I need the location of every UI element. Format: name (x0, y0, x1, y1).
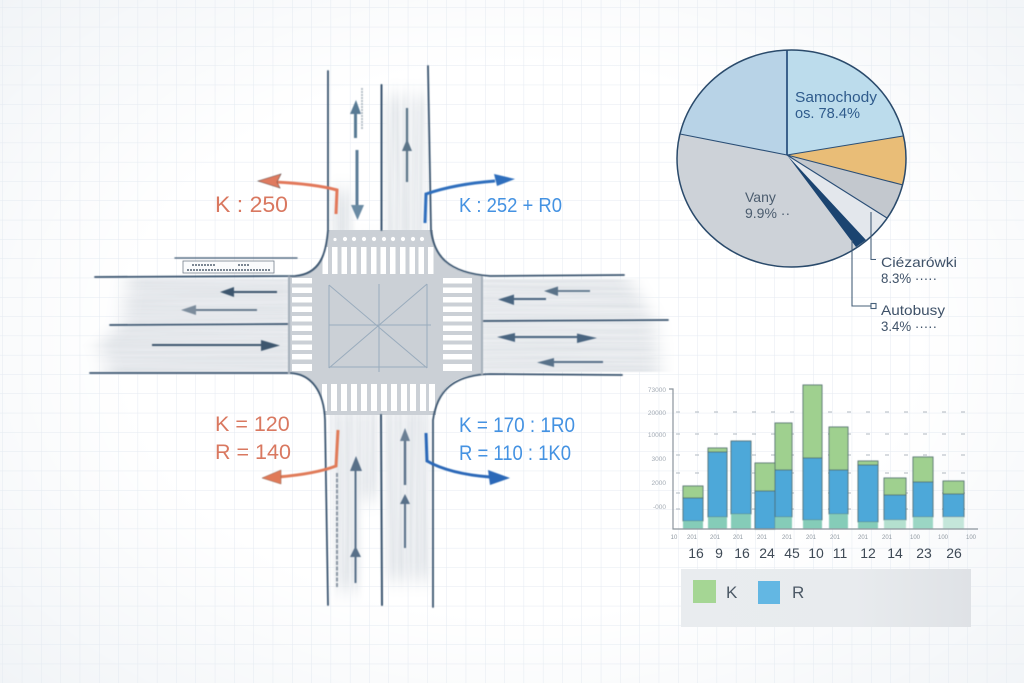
panel: stacked bar chart (648, 385, 980, 627)
arrow: north lane down (351, 150, 364, 220)
x axis small labels: 201 (782, 535, 793, 541)
x axis values: 14 (887, 545, 903, 561)
x axis small labels: 201 (733, 535, 744, 541)
arrow: north lane up (350, 100, 361, 138)
x axis values: 11 (833, 545, 847, 561)
right crosswalk (443, 278, 472, 371)
pie label: Vany: 9.9% ·· (745, 205, 790, 221)
arrow: east lane 2 (498, 294, 546, 305)
slice dividers (680, 134, 903, 218)
pie label: Ciézarówki (881, 254, 957, 286)
y axis labels: 20000 (648, 410, 666, 417)
y axis labels: 73000 (648, 387, 666, 394)
pie label: Autobusy (881, 302, 945, 334)
bar 11 (943, 481, 964, 529)
x axis values: 16 (734, 545, 750, 561)
x axis small labels: 201 (882, 535, 893, 541)
arrow: south lane right lower (400, 494, 410, 548)
y axis labels: 10000 (648, 432, 666, 439)
bar 3 (731, 441, 751, 529)
label: K 170 R 110: R = 110 : 1K0 (459, 442, 571, 465)
top crosswalk (322, 237, 434, 274)
y axis labels: 3000 (652, 456, 666, 463)
arrow: west lane 3 (152, 340, 280, 351)
arrow: south lane left (350, 456, 362, 583)
left road surface (95, 278, 288, 372)
leader: Autobusy (852, 240, 876, 308)
label: K 252 + R0: K : 252 + R0 (459, 194, 562, 217)
bar 8 (858, 461, 878, 529)
label: K 170 R 110: K = 170 : 1R0 (459, 414, 575, 437)
right road surface (480, 277, 674, 374)
pie label: Vany: Vany (745, 189, 776, 205)
bar 7 (829, 427, 848, 529)
x axis small labels: 201 (858, 535, 869, 541)
x axis values: 26 (946, 545, 962, 561)
x axis small labels: 201 (710, 535, 721, 541)
y axis gridlines (676, 412, 980, 509)
lane arrows: south (337, 428, 410, 588)
x axis small labels: 201 (757, 535, 768, 541)
arrow: north lane right (402, 108, 412, 182)
pie outline (677, 50, 906, 267)
small road text north (361, 88, 363, 130)
slice: grey small (790, 156, 902, 217)
x axis values (688, 545, 962, 561)
arrow: west lane 2 (181, 305, 257, 315)
arrow: east lane 4 (537, 358, 603, 367)
axes (669, 389, 978, 529)
label: K 170 R 110 (459, 414, 575, 465)
lane arrows: west (152, 287, 280, 351)
bottom road surface (330, 415, 431, 594)
label: K 120 R 140: K = 120 (215, 412, 290, 436)
bar 10 (913, 457, 933, 529)
x axis small labels: 201 (687, 535, 698, 541)
junction pavement (289, 230, 482, 415)
arrow: orange top-left turn (258, 174, 337, 214)
x axis small labels: 100 (938, 535, 949, 541)
x axis small labels: 10 (671, 535, 678, 541)
arrow: east lane 3 double-headed (497, 333, 597, 343)
bar 5 (775, 423, 792, 529)
bar 6 (803, 385, 822, 529)
pie label: Ciézarówki: Ciézarówki (881, 254, 957, 270)
arrow: east lane 1 (544, 286, 590, 296)
y axis labels: -000 (653, 504, 666, 511)
arrow: orange bottom-left turn (262, 430, 338, 484)
bar 4 (755, 463, 775, 529)
y axis labels (648, 387, 666, 511)
legend label K: K (726, 583, 738, 602)
top road surface (332, 91, 427, 230)
x axis small labels: 100 (910, 535, 921, 541)
x axis values: 12 (860, 545, 876, 561)
x axis small labels: 201 (830, 535, 841, 541)
pie label: Ciézarówki: 8.3% ····· (881, 270, 937, 286)
x axis values: 9 (715, 545, 723, 561)
legend label R: R (792, 583, 804, 602)
legend box (681, 569, 971, 627)
pie label: Samochody: Samochody (795, 89, 878, 106)
legend swatch K (693, 580, 716, 603)
label: K 250: K : 250 (215, 192, 288, 217)
x axis small labels: 100 (966, 535, 977, 541)
lane arrows: east (497, 286, 603, 367)
slice: Vany (678, 134, 858, 266)
label: K 120 R 140 (215, 412, 291, 464)
slice: upper-left blue (681, 51, 786, 154)
pie label: Samochody: os. 78.4% (795, 105, 860, 122)
road sign plate (183, 261, 274, 273)
bar 1 (683, 486, 703, 529)
arrow: south lane right upper (400, 428, 410, 485)
arrow: west lane 1 (220, 287, 277, 297)
x axis values: 16 (688, 545, 704, 561)
x axis small labels: 201 (806, 535, 817, 541)
pie slices (678, 50, 906, 266)
label: K 120 R 140: R = 140 (215, 440, 291, 464)
junction centre markings (329, 284, 431, 372)
arrow: blue top-right turn (425, 174, 515, 223)
bar 2 (708, 448, 727, 529)
legend swatch R (758, 581, 780, 604)
y axis labels: 2000 (652, 480, 666, 487)
panel: vehicle share pie chart (660, 40, 957, 334)
panel: intersection diagram (70, 66, 674, 607)
slice: orange (790, 136, 906, 184)
slice: Samochody osobowe (788, 50, 902, 154)
bars (683, 385, 964, 529)
pie label: Vany (745, 189, 790, 221)
x axis values: 10 (808, 545, 824, 561)
arrow: blue bottom-right turn (426, 433, 510, 485)
road edge lines (90, 66, 668, 607)
x axis values: 23 (916, 545, 932, 561)
left crosswalk (292, 278, 312, 371)
pie label: Samochody (795, 89, 878, 122)
leader: Ciężarówki (871, 212, 876, 260)
bar 9 (884, 478, 906, 529)
x axis values: 45 (784, 545, 800, 561)
bottom crosswalk (322, 384, 435, 411)
pie label: Autobusy: Autobusy (881, 302, 945, 318)
lane arrows: north (350, 88, 412, 220)
road marking strip south (336, 473, 338, 588)
slice: Autobusy dark wedge (787, 155, 866, 247)
slice divider vertical (786, 50, 788, 155)
x axis values: 24 (759, 545, 775, 561)
x axis small labels (671, 535, 977, 541)
pie label: Autobusy: 3.4% ····· (881, 318, 937, 334)
